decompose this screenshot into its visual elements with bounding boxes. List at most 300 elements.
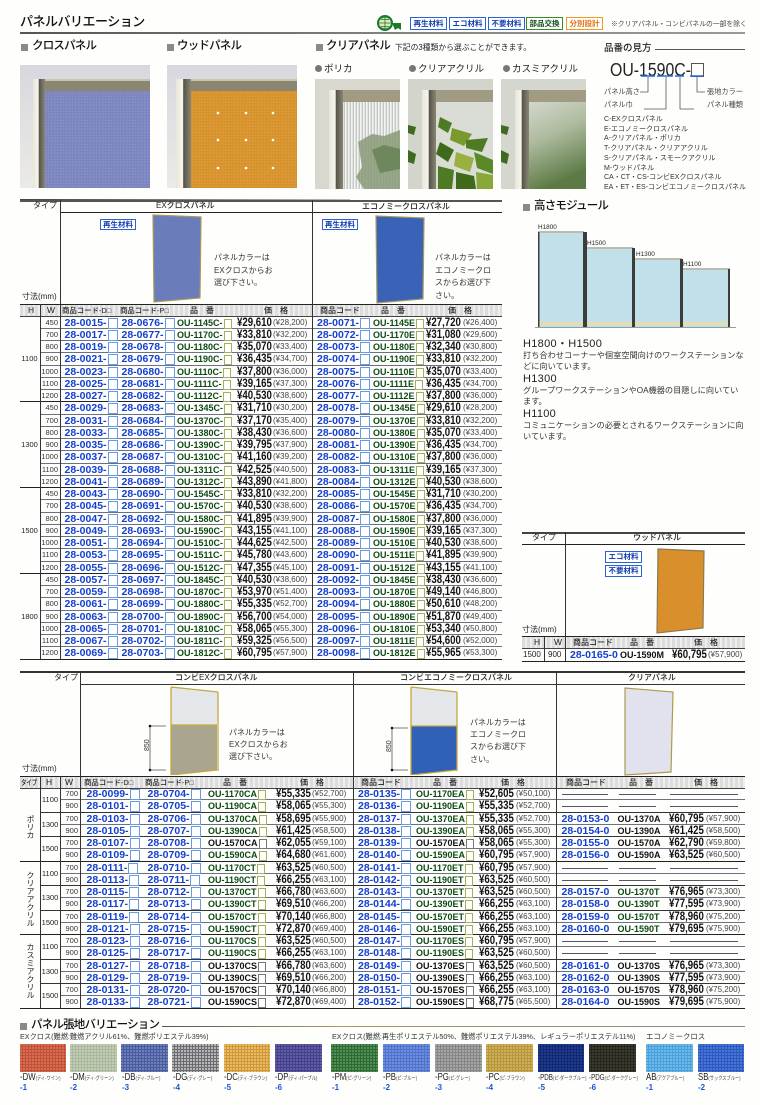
table 1 rows: H1100: ¥29,610: [237, 316, 272, 328]
table 1 rows: H1100: 28-0025-: [64, 378, 107, 390]
table 1 rows: H1100: ¥36,435: [426, 378, 461, 390]
table 3 rows: frosted acrylic: (¥66,800): [312, 985, 346, 994]
table 1 rows: H1100: OU-1110C-: [177, 366, 222, 376]
table 1 rows: H1300: 28-0035-: [64, 439, 107, 451]
panel type legend: [604, 115, 746, 191]
table 1 rows: H1300: ¥35,070: [426, 427, 461, 439]
note: combi economy colour: さい。: [470, 755, 494, 764]
table 3 rows: frosted acrylic: 28-0125-: [86, 947, 129, 959]
table 1 rows: H1300: 28-0082-: [317, 451, 359, 463]
table 1 rows: H1100: 28-0023-: [64, 366, 107, 378]
table 3 rows: polycarbonate: (¥52,700): [516, 814, 550, 822]
tag: recycled economy: 再生材料: [325, 220, 355, 229]
table 3 rows: frosted acrylic: (¥63,100): [516, 985, 550, 994]
text: H1100: いています。: [523, 432, 571, 441]
table 1 rows: H1100: ¥33,810: [426, 353, 461, 365]
table 1 rows: H1500: 28-0090-: [317, 549, 359, 561]
table 1 rows: H1500: (¥42,500): [273, 538, 307, 547]
table 1 rows: H1800: OU-1811E: [373, 636, 415, 646]
table 1 rows: H1800: 28-0094-: [317, 598, 359, 610]
table 3 rows: clear acrylic: 28-0143-: [358, 886, 400, 898]
table 1 rows: H1100: ¥36,435: [237, 353, 272, 365]
table 1 column headers: H: [28, 305, 34, 315]
swatch labels: -1: [332, 1083, 339, 1092]
table 1 rows: H1800: 28-0061-: [64, 598, 107, 610]
text: H1300: グループワークステーションやOA機器の目隠しに向いてい: [523, 386, 738, 395]
table 1 rows: H1800: 28-0057-: [64, 574, 107, 586]
table 3 rows: polycarbonate: 1100: [42, 795, 58, 804]
diagram: panel heights: [535, 224, 736, 328]
table 3 column headers: 品 番: [223, 778, 247, 787]
table 3 rows: frosted acrylic: (¥66,200): [312, 973, 346, 982]
table 3 rows: frosted acrylic: (¥73,900): [706, 973, 740, 982]
swatch: PM: [331, 1044, 378, 1072]
table 3 rows: clear acrylic: OU-1590ET: [416, 924, 464, 934]
table 3 rows: clear acrylic: OU-1370T: [618, 887, 660, 897]
swatch labels: [20, 1072, 741, 1092]
table 3 rows: polycarbonate: (¥60,500): [706, 850, 740, 859]
table 3 rows: clear acrylic: 28-0117-: [86, 898, 128, 910]
table 1 rows: H1300: (¥40,500): [273, 464, 307, 474]
table 1 rows: H1500: ¥44,625: [237, 537, 272, 549]
table 3 rows: frosted acrylic: OU-1390CS: [208, 973, 257, 983]
text: H1100: コミュニケーションの必要とされるワークステーションに向: [523, 421, 744, 430]
environment tags: エコ材料: [452, 19, 482, 28]
heading: combi EX: コンビEXクロスパネル: [175, 673, 258, 682]
table 3 rows: clear acrylic: ¥66,780: [276, 886, 311, 898]
table 3 rows: clear acrylic: ¥69,510: [276, 898, 311, 910]
table 1 rows: H1300: (¥36,600): [273, 428, 307, 437]
table 3 rows: polycarbonate: OU-1170CA: [208, 789, 257, 799]
part number connectors: [640, 75, 705, 110]
table 1 rows: H1300: OU-1380C-: [177, 428, 223, 438]
table 1 rows: H1800: ¥53,340: [426, 623, 461, 635]
table 1 rows: H1100: OU-1190E: [373, 354, 415, 364]
label: EX cross P: EXクロス(難燃:再生ポリエステル50%、難燃ポリエステル39%、レギュラーポリエステル11%): [332, 1032, 635, 1041]
table 3 rows: clear acrylic: OU-1170ET: [416, 862, 464, 872]
table 1 rows: H1300: ¥33,810: [426, 414, 461, 426]
table 3 rows: frosted acrylic: OU-1590CS: [208, 997, 257, 1007]
swatch labels: -PC(ピ-ブラウン): [486, 1072, 525, 1083]
tag: eco: [605, 551, 642, 563]
table 1 rows: H1800: OU-1812E: [373, 648, 416, 658]
swatch: SB: [698, 1044, 744, 1072]
table 1 rows: H1500: [20, 488, 502, 574]
table 1 rows: H1800: 450: [45, 575, 58, 584]
table 1 rows: H1300: 28-0041-: [64, 476, 107, 488]
table 1 rows: H1300: 28-0084-: [317, 476, 359, 488]
table 1 rows: H1800: ¥56,700: [237, 610, 272, 622]
panel type legend: S-クリアパネル・スモークアクリル: [604, 155, 716, 162]
table 1 rows: H1300: ¥38,430: [237, 427, 272, 439]
table 1 rows: H1300: OU-1311C-: [177, 464, 223, 474]
table 1 rows: H1100: (¥33,400): [273, 342, 307, 351]
table 1 rows: H1500: OU-1510E: [373, 538, 416, 548]
table 3 rows: frosted acrylic: 28-0133-: [86, 996, 129, 1008]
table 1 rows: H1800: 28-0697-: [122, 574, 164, 586]
table 1 rows: H1800: OU-1811C-: [177, 636, 223, 646]
table 1 rows: H1500: OU-1580C-: [177, 514, 223, 524]
table 3 rows: frosted acrylic: 28-0718-: [148, 960, 190, 972]
table 1 rows: H1100: 28-0072-: [317, 329, 359, 341]
diagram: panel heights: H1300: [636, 251, 655, 258]
table 3 rows: clear acrylic: (¥63,100): [516, 899, 550, 908]
table 3 rows: clear acrylic: 28-0714-: [148, 910, 190, 922]
table 1 rows: H1300: ¥39,795: [237, 439, 272, 451]
table 1 rows: H1800: 28-0093-: [317, 586, 359, 598]
table 3 rows: frosted acrylic: OU-1370S: [618, 960, 660, 970]
table 1 rows: H1500: 28-0089-: [317, 537, 359, 549]
table 1 rows: H1300: 800: [45, 428, 58, 437]
table 1 rows: H1800: (¥48,200): [463, 599, 497, 608]
part number labels: パネル高さ: [604, 87, 640, 96]
table 3 rows: clear acrylic: 1500: [42, 918, 58, 926]
table 1 rows: H1300: OU-1311E: [373, 464, 415, 474]
table 1 rows: H1500: ¥47,355: [237, 562, 272, 574]
panel: wood panel table: [522, 532, 745, 662]
swatch labels: -PM(ピ-グリーン): [332, 1072, 371, 1083]
table 1 rows: H1500: ¥36,435: [426, 500, 461, 512]
table 1 rows: H1100: 28-0681-: [122, 378, 164, 390]
table 3 rows: polycarbonate: 28-0704-: [148, 788, 190, 800]
swatch: PG: [435, 1044, 482, 1072]
table 1 rows: H1800: OU-1870C-: [177, 587, 223, 597]
table 1 rows: H1500: 28-0045-: [64, 500, 107, 512]
table 1 rows: H1500: 28-0053-: [64, 549, 107, 561]
table 1 rows: H1300: 28-0031-: [64, 414, 107, 426]
table 3 rows: frosted acrylic: OU-1590S: [618, 997, 660, 1007]
table 3 rows: polycarbonate: (¥50,100): [516, 789, 550, 798]
table 3 rows: clear acrylic: ¥76,965: [669, 886, 704, 898]
table 3 rows: frosted acrylic: 900: [65, 997, 78, 1006]
table 1 rows: H1100: (¥36,000): [273, 366, 307, 376]
table 1 rows: H1300: (¥30,200): [273, 403, 307, 412]
table 3 rows: polycarbonate: 28-0155-0: [562, 837, 609, 849]
table 1 rows: H1300: 700: [45, 416, 58, 424]
table 3 rows: polycarbonate: (¥55,300): [516, 826, 550, 835]
swatch: DG: [172, 1044, 219, 1072]
swatch labels: -5: [224, 1083, 231, 1092]
swatch labels: -1: [646, 1083, 653, 1092]
part number example: OU-1590C-: [610, 60, 691, 80]
table 1 rows: H1800: (¥57,900): [273, 648, 307, 657]
table 3 rows: clear acrylic: (¥75,900): [706, 924, 740, 933]
photo: polycarbonate: [315, 79, 400, 189]
tag: eco: エコ材料: [608, 552, 638, 561]
table 1 rows: H1100: (¥32,200): [273, 330, 307, 339]
table 1 rows: H1800: ¥58,065: [237, 623, 272, 635]
table 3 rows: frosted acrylic: ¥78,960: [669, 984, 704, 996]
table 1 rows: H1100: 28-0077-: [317, 390, 359, 402]
table 1 rows: H1100: OU-1110E: [373, 366, 415, 376]
table 1 rows: H1100: OU-1170E: [373, 330, 415, 340]
size unit: 寸法(mm): [22, 764, 57, 773]
heading: clear panel: [316, 40, 531, 52]
table 1 rows: H1800: 900: [45, 612, 58, 620]
table 1 rows: H1300: 1200: [41, 477, 58, 486]
table 3 rows: polycarbonate: 28-0153-0: [562, 812, 609, 824]
table 1 rows: H1100: OU-1145E: [373, 318, 415, 328]
table 1 rows: H1300: (¥28,200): [463, 403, 497, 412]
table 3 rows: polycarbonate: 28-0107-: [86, 837, 129, 849]
table 3 rows: clear acrylic: 700: [65, 912, 78, 920]
table 3 rows: polycarbonate: OU-1590EA: [416, 850, 465, 860]
swatch labels: -PDG(ピ-ダークグレー): [589, 1073, 638, 1082]
note: economy colour: さい。: [435, 290, 459, 300]
size unit: 寸法(mm): [22, 292, 57, 301]
text: H1800 H1500: どに向いています。: [523, 362, 596, 371]
table 3 rows: clear acrylic: 900: [65, 924, 78, 933]
table 3 rows: clear acrylic: ¥66,255: [479, 898, 514, 910]
table 3 rows: clear acrylic: 700: [65, 862, 78, 872]
table 1 rows: H1100: 28-0074-: [317, 353, 359, 365]
table 1 column headers: 品 番: [381, 306, 405, 315]
table 1 rows: H1500: 28-0088-: [317, 525, 359, 537]
type label: タイプ: [54, 673, 78, 682]
table 1 rows: H1100: (¥38,600): [273, 391, 307, 400]
table 1 rows: H1100: 28-0680-: [122, 366, 164, 378]
table 1 rows: H1100: 28-0679-: [122, 353, 164, 365]
table 3 column headers: 商品コード: [361, 778, 401, 787]
wood column headers: [522, 636, 745, 649]
table 1 rows: H1500: OU-1570E: [373, 501, 416, 511]
table 3 rows: clear acrylic: 28-0157-0: [562, 886, 609, 898]
clear panel variant labels: [315, 64, 578, 75]
table 1 rows: H1100: 1200: [41, 391, 58, 400]
photo: frosted acrylic: [501, 79, 586, 189]
wood type label: タイプ: [532, 533, 556, 542]
table 1 rows: H1100: 28-0019-: [64, 341, 107, 353]
table 3 rows: clear acrylic: OU-1570T: [618, 912, 660, 922]
table 1 rows: H1300: 28-0689-: [122, 476, 164, 488]
heading: height module: 高さモジュール: [534, 200, 608, 212]
table 3 rows: clear acrylic: 28-0113-: [86, 874, 128, 886]
swatch labels: -3: [435, 1083, 442, 1092]
table 1 column headers: 商品コード: [320, 306, 360, 315]
table 1 rows: H1300: ¥37,170: [237, 414, 272, 426]
table 1 rows: H1800: 28-0700-: [122, 610, 164, 622]
table 1 rows: H1500: 700: [45, 501, 58, 510]
table 3 rows: clear acrylic: クリアアクリル: [26, 870, 35, 926]
part number guide: [604, 42, 746, 191]
table 3 rows: polycarbonate: ¥63,525: [669, 849, 704, 861]
swatch labels: -6: [275, 1083, 282, 1092]
table 1 rows: H1100: (¥26,400): [463, 318, 497, 326]
swatch labels: -PB(ピ-ブルー): [383, 1072, 417, 1083]
table 1 rows: H1100: 1000: [41, 366, 58, 376]
table 1 rows: H1800: (¥56,500): [273, 636, 307, 645]
table 1 rows: H1100: 800: [45, 342, 58, 351]
table 1 rows: H1500: OU-1590E: [373, 526, 416, 536]
table 1 column headers: [20, 304, 502, 317]
wood column headers: 品 番: [630, 638, 654, 647]
table 1 rows: H1100: (¥34,700): [273, 354, 307, 363]
table 3 rows: clear acrylic: 900: [65, 875, 78, 884]
table 3 rows: polycarbonate: 28-0140-: [358, 849, 400, 861]
table 3 rows: clear acrylic: OU-1590CT: [208, 924, 257, 934]
table 1 rows: H1100: ¥40,530: [237, 390, 272, 402]
table 3 rows: frosted acrylic: (¥60,500): [516, 960, 550, 970]
table 3 rows: clear acrylic: 700: [65, 887, 78, 896]
table 3 rows: clear acrylic: ¥72,870: [276, 923, 311, 935]
swatch labels: -PDB(ピ-ダークブルー): [538, 1073, 587, 1082]
table 3 rows: clear acrylic: 28-0144-: [358, 898, 400, 910]
table 3 rows: clear acrylic: ¥63,525: [276, 862, 311, 874]
table 1 rows: H1500: ¥45,780: [237, 549, 272, 561]
table 1 rows: H1800: 28-0098-: [317, 647, 359, 659]
swatch: PB: [383, 1044, 430, 1072]
table 3 rows: clear acrylic: 28-0142-: [358, 874, 400, 886]
table 1 rows: H1800: 700: [45, 587, 58, 596]
wood column headers: 価 格: [694, 638, 718, 647]
table 1 rows: H1300: 28-0078-: [317, 402, 359, 414]
table 1 rows: H1500: OU-1512C-: [177, 562, 223, 572]
table 1 rows: H1300: 28-0684-: [122, 414, 164, 426]
table 3 rows: polycarbonate: ¥58,065: [479, 825, 514, 837]
photo: clear acrylic: [408, 79, 493, 189]
table 3 rows: polycarbonate: 700: [65, 814, 78, 822]
table 1 rows: H1800: (¥54,000): [273, 612, 307, 620]
table 1 rows: H1500: 28-0692-: [122, 512, 164, 524]
table 1 column headers: 価 格: [448, 306, 472, 315]
table 3 rows: polycarbonate: 28-0103-: [86, 812, 129, 824]
table 1 rows: H1500: (¥39,900): [273, 514, 307, 522]
text: H1300: ます。: [523, 397, 547, 406]
table 1 rows: H1300: ¥41,160: [237, 451, 272, 463]
table 1 rows: H1500: OU-1545C-: [177, 489, 223, 499]
table 1 rows: H1800: ¥54,600: [426, 635, 461, 647]
table 3 rows: frosted acrylic: 28-0163-0: [562, 984, 609, 996]
table 3 rows: clear acrylic: OU-1390T: [618, 899, 660, 909]
table 1 rows: H1100: OU-1180C-: [177, 342, 223, 352]
table 1 rows: H1500: 28-0087-: [317, 512, 359, 524]
table 1 rows: H1300: OU-1310C-: [177, 452, 223, 462]
panel: height module: [523, 199, 744, 441]
table 1 rows: H1500: 28-0691-: [122, 500, 164, 512]
table 1 rows: H1300: OU-1380E: [373, 428, 416, 438]
table 1 rows: H1300: (¥37,900): [273, 440, 307, 449]
table 1 rows: H1800: OU-1880C-: [177, 599, 223, 609]
table 3 rows: polycarbonate: 28-0139-: [358, 837, 400, 849]
table 3 rows: clear acrylic: (¥63,100): [516, 912, 550, 920]
swatch labels: -4: [173, 1083, 180, 1092]
clear panel variant labels: カスミアクリル: [512, 64, 578, 75]
table 1 rows: H1500: 28-0693-: [122, 525, 164, 537]
image: combi economy panel: 850: [386, 740, 393, 752]
table 3 rows: polycarbonate: (¥55,300): [516, 838, 550, 847]
table 1 rows: H1500: 28-0055-: [64, 562, 107, 574]
table 1 rows: H1800: 1800: [21, 612, 38, 620]
table 3 rows: frosted acrylic: (¥75,200): [706, 985, 740, 994]
note: combi economy colour: エコノミークロ: [470, 730, 526, 739]
table 3 rows: frosted acrylic: 28-0162-0: [562, 972, 609, 984]
table 1 rows: H1300: (¥32,200): [463, 416, 497, 424]
table 3 rows: clear acrylic: 28-0119-: [86, 910, 128, 922]
table 1 rows: H1300: (¥38,600): [463, 477, 497, 486]
table 1 rows: H1800: OU-1812C-: [177, 648, 223, 658]
note: economy colour: [435, 253, 491, 300]
table 3 rows: clear acrylic: OU-1390CT: [208, 899, 257, 909]
table 3 rows: frosted acrylic: (¥73,300): [706, 960, 740, 970]
heading: fabric variations: パネル張地バリエーション: [31, 1019, 159, 1031]
table 1 rows: H1500: 1000: [41, 538, 58, 547]
swatch: PDG: [589, 1044, 636, 1072]
swatch labels: -2: [70, 1083, 77, 1092]
table 3 rows: frosted acrylic: 28-0147-: [358, 935, 400, 947]
photo: cross panel: [20, 65, 150, 188]
table 1 rows: H1100: 28-0076-: [317, 378, 359, 390]
wood product row: (¥57,900): [708, 650, 742, 659]
table 1 rows: H1300: OU-1345C-: [177, 403, 223, 413]
table 3 rows: clear acrylic: 28-0710-: [148, 862, 190, 874]
table 3 rows: frosted acrylic: (¥65,500): [516, 997, 550, 1006]
table 1 rows: H1800: OU-1845E: [373, 575, 416, 585]
table 1 rows: H1100: ¥32,340: [426, 341, 461, 353]
table 1 rows: H1100: (¥29,600): [463, 330, 497, 339]
table 1 rows: H1500: OU-1512E: [373, 562, 416, 572]
table 1 column headers: W: [47, 305, 55, 315]
table 1 rows: H1100: 1100: [21, 354, 38, 363]
product photos: [20, 65, 586, 189]
table 3 rows: polycarbonate: 28-0708-: [148, 837, 190, 849]
note: combi economy colour: [470, 718, 526, 764]
table 3 rows: frosted acrylic: OU-1570CS: [208, 985, 257, 995]
table 3 rows: clear acrylic: 28-0715-: [148, 923, 190, 935]
table 3 rows: frosted acrylic: OU-1390ES: [416, 973, 465, 983]
table 3 rows: clear acrylic: (¥57,900): [516, 862, 550, 872]
table 3 rows: frosted acrylic: ¥69,510: [276, 972, 311, 984]
table 3 rows: polycarbonate: 28-0105-: [86, 825, 129, 837]
table 1 rows: H1800: ¥49,140: [426, 586, 461, 598]
table 1 rows: H1500: ¥43,155: [426, 562, 461, 574]
table 1 rows: H1300: 28-0037-: [64, 451, 107, 463]
table 1 rows: H1500: (¥38,600): [273, 501, 307, 510]
table 1 rows: H1500: (¥36,000): [463, 514, 497, 522]
table 3 rows: polycarbonate: ¥61,425: [276, 825, 311, 837]
table 3 rows: clear acrylic: OU-1190CT: [208, 875, 256, 885]
heading: clear panel: 下記の3種類から選ぶことができます。: [395, 43, 531, 52]
table 1 rows: H1300: ¥31,710: [237, 402, 272, 414]
table 1 rows: H1500: OU-1510C-: [177, 538, 223, 548]
table 1 rows: H1300: 28-0083-: [317, 464, 359, 476]
table 3 rows: polycarbonate: 28-0137-: [358, 812, 400, 824]
table 1 rows: H1800: (¥50,800): [463, 624, 497, 633]
table 1 rows: H1500: 28-0043-: [64, 488, 107, 500]
table 1 rows: H1500: 28-0047-: [64, 512, 107, 524]
table 3 rows: polycarbonate: OU-1570CA: [208, 838, 258, 848]
swatch labels: -DM(ディ-グリーン): [70, 1072, 114, 1083]
table 3 rows: frosted acrylic: ¥66,255: [479, 972, 514, 984]
table 3 column headers: 商品コード-P□: [145, 778, 194, 787]
environment tags: [410, 17, 603, 30]
tag: recycled EX: 再生材料: [103, 220, 133, 229]
photo: wood panel: [167, 65, 297, 188]
wood product row: 1500: [523, 650, 541, 659]
table 1 rows: H1300: 28-0683-: [122, 402, 164, 414]
table 1 rows: H1800: ¥59,325: [237, 635, 272, 647]
table 1 rows: H1500: (¥41,100): [273, 526, 307, 535]
image: clear panel: [624, 687, 674, 776]
table 1 rows: H1100: OU-1111C-: [177, 379, 222, 389]
table 3 rows: frosted acrylic: (¥63,100): [312, 948, 346, 957]
table 3 rows: polycarbonate: ¥61,425: [669, 825, 704, 837]
table 1 rows: H1300: 450: [45, 403, 58, 412]
table 1 rows: H1100: (¥37,300): [273, 379, 307, 388]
table 1 rows: H1500: (¥43,600): [273, 550, 307, 559]
table 1 rows: H1300: OU-1370E: [373, 416, 416, 426]
table 1 rows: H1800: ¥53,970: [237, 586, 272, 598]
table 3 rows: polycarbonate: OU-1190EA: [416, 801, 465, 811]
